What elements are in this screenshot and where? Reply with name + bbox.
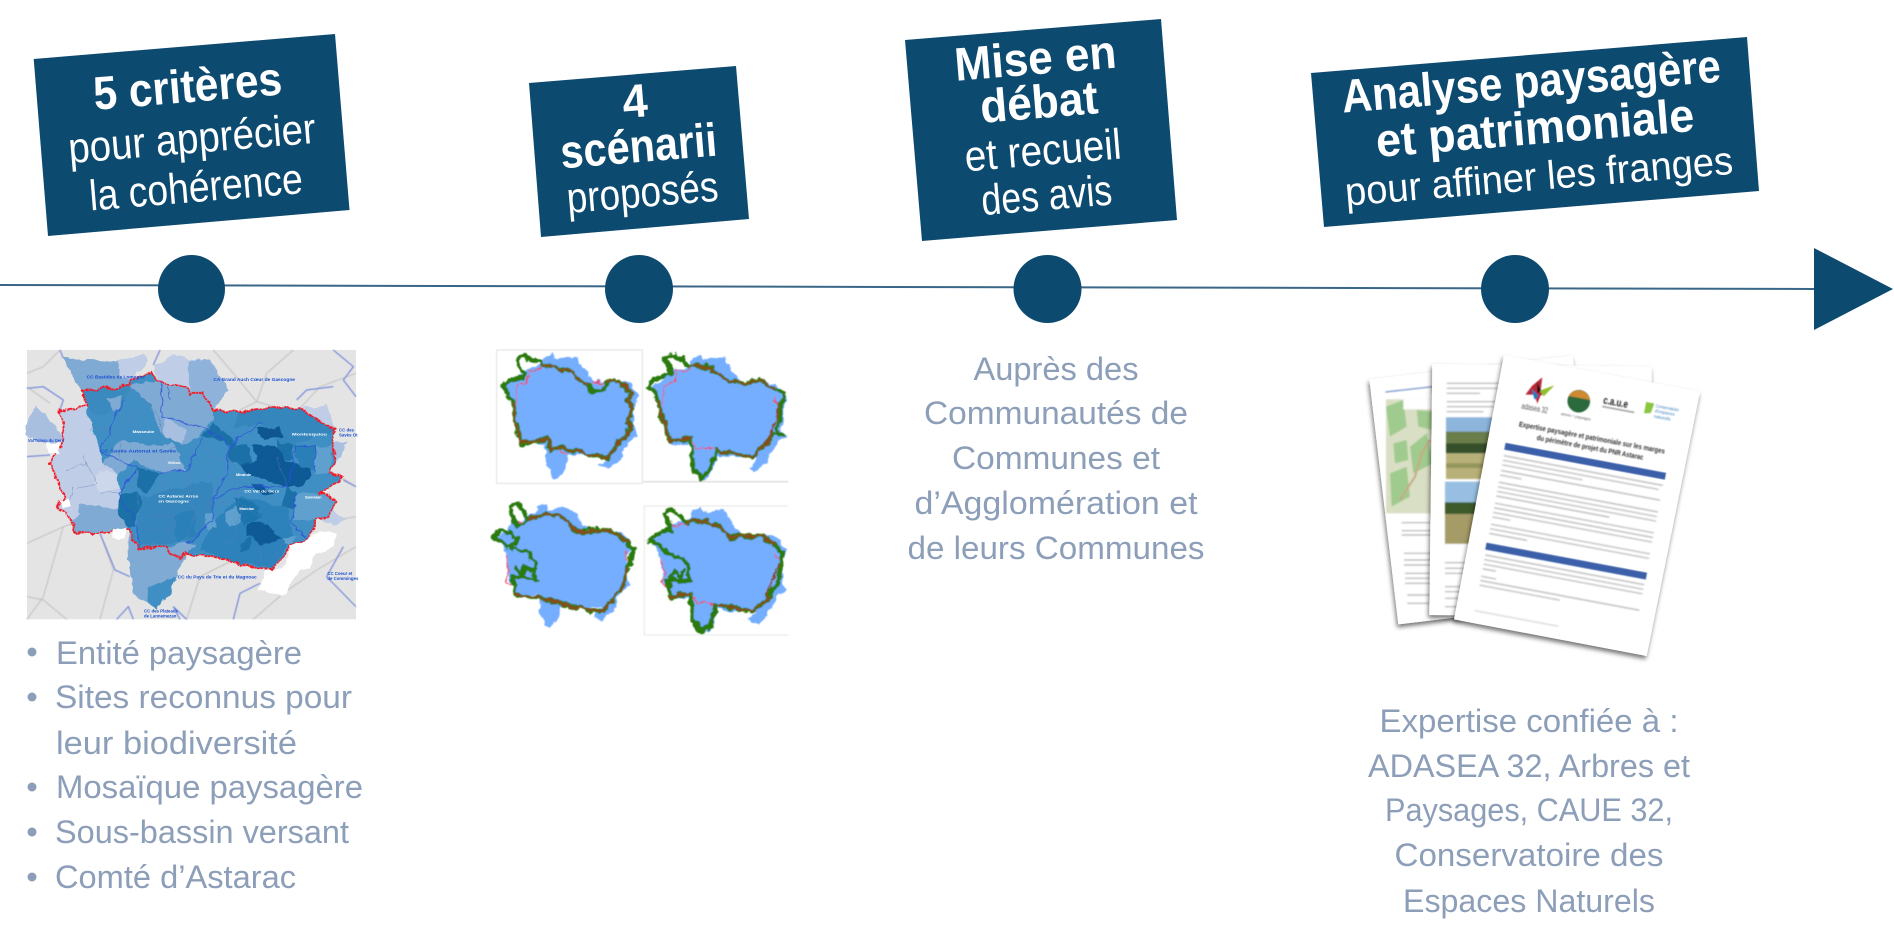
text block: experts: Espaces Naturels [1403, 883, 1655, 919]
heading panel: mise en débat: des avis [979, 166, 1114, 225]
heading panel: 5 critères: la cohérence [87, 155, 305, 221]
scenario 1 [503, 354, 638, 478]
red perimeter [50, 373, 342, 570]
back page [1369, 356, 1603, 624]
heading panel: 4 scénarii [529, 66, 749, 237]
front page [1454, 355, 1700, 656]
map place labels: Mirande [236, 472, 252, 477]
map place labels: CC Astarac Arros [158, 493, 199, 498]
criteria text [55, 635, 363, 895]
map place labels: CC des Plateaux [144, 609, 179, 614]
heading panel: 4 scénarii: proposés [565, 163, 720, 223]
map place labels: Samatan [305, 495, 322, 500]
landscape photo 2 [1445, 482, 1498, 544]
map place labels: CC Coeur et [327, 571, 353, 576]
document stack: landscape study [1369, 355, 1700, 656]
map place labels: CC Val de Gers [244, 489, 280, 494]
map place labels: Villeco [168, 460, 181, 465]
heading panel: 5 critères: 5 critères [91, 52, 284, 120]
darkest communes [257, 427, 285, 440]
text block: experts: ADASEA 32, Arbres et [1368, 748, 1690, 784]
map place labels: Montesquiou [292, 432, 328, 437]
logos: Conservatoire [1655, 403, 1680, 413]
document title: du périmètre de projet du PNR Astarac [1536, 435, 1644, 462]
criteria text: Sites reconnus pour [55, 679, 352, 715]
bullet list: five criteria [28, 635, 363, 895]
map place labels: CC du Pays de Trie et du Magnoac [178, 574, 257, 579]
map place labels: Marciac [239, 506, 255, 511]
scenario 2 [648, 355, 787, 479]
map place labels: CC Bastides de Lomagne [87, 374, 146, 379]
logos [1521, 375, 1680, 439]
map: coherence criteria choropleth [27, 350, 359, 619]
document title: Expertise paysagère et patrimoniale sur les marges [1518, 421, 1665, 456]
map place labels: en Gascogne [158, 498, 190, 503]
text block: consultation audience: Auprès des [974, 351, 1138, 387]
text block: consultation audience: d’Agglomération et [914, 485, 1198, 521]
heading panel: analyse paysagère et patrimoniale: Analyse paysagère [1339, 39, 1723, 123]
body text lines [1475, 456, 1663, 640]
section bar 2 [1485, 543, 1647, 580]
heading panel: 5 critères: pour apprécier [66, 105, 317, 173]
map place labels: CC Savès Autonat et Savès [100, 449, 177, 454]
panel: four scenario maps [493, 350, 788, 635]
milestone dot 4 [1481, 255, 1549, 323]
map place labels: CA Grand Auch Cœur de Gascogne [213, 377, 296, 382]
milestone dot 1 [158, 255, 225, 323]
bullet markers [28, 648, 36, 882]
logos: naturels [1653, 414, 1671, 423]
heading panel: 4 scénarii: scénarii [558, 113, 719, 178]
excluded white communes [47, 443, 337, 595]
milestone dot 3 [1014, 255, 1082, 323]
timeline axis [0, 285, 1816, 289]
map place labels: CC des [339, 428, 355, 433]
criteria text: Mosaïque paysagère [56, 769, 363, 805]
criteria text: Sous-bassin versant [55, 814, 349, 850]
logos: adasea 32 [1521, 402, 1549, 415]
text block: consultation audience [908, 351, 1204, 566]
map place labels: Masseube [133, 429, 155, 434]
map place labels: de Lannemezan [144, 613, 177, 618]
heading panel: analyse paysagère et patrimoniale: et patrimoniale [1374, 88, 1696, 167]
heading panel: mise en débat: débat [978, 70, 1100, 133]
landscape photo 1 [1446, 417, 1499, 479]
heading panel: 4 scénarii: 4 [620, 73, 649, 128]
section bar 1 [1504, 443, 1666, 480]
arrow head [1814, 248, 1893, 330]
milestone dot 2 [605, 255, 673, 323]
heading panel: mise en débat [905, 19, 1177, 241]
parc perimeter fills [50, 373, 342, 570]
logos: c.a.u.e [1602, 394, 1629, 411]
text block: consultation audience: de leurs Communes [908, 530, 1204, 566]
heading panel: mise en débat: Mise en [952, 25, 1118, 91]
logos: arbres + paysages [1561, 412, 1591, 421]
heading panel: analyse paysagère et patrimoniale: pour affiner les franges [1343, 139, 1735, 215]
criteria text: leur biodiversité [56, 725, 297, 761]
map place labels [28, 374, 359, 618]
text block: consultation audience: Communes et [952, 440, 1160, 476]
text block: experts: Conservatoire des [1394, 837, 1664, 873]
scenario 4 [650, 508, 787, 632]
text block: experts: Paysages, CAUE 32, [1385, 792, 1673, 828]
map place labels: de Comminges [327, 576, 359, 581]
outer territory lobes [27, 353, 347, 610]
logos: d'espaces [1654, 408, 1676, 418]
text block: consultation audience: Communautés de [924, 395, 1188, 431]
middle page [1429, 364, 1652, 617]
text block: experts: Expertise confiée à : [1380, 703, 1678, 739]
text block: experts [1368, 703, 1690, 919]
scenario frames [497, 350, 788, 635]
heading panel: analyse paysagère et patrimoniale [1311, 37, 1759, 227]
heading panel: 5 critères [34, 34, 349, 236]
heading panel: mise en débat: et recueil [963, 121, 1123, 181]
criteria text: Entité paysagère [56, 635, 302, 671]
scenario 3 [493, 503, 633, 628]
map place labels: Val'Tolosa du Gers [28, 438, 65, 443]
criteria text: Comté d’Astarac [55, 859, 296, 895]
map place labels: Savès Ot [339, 432, 358, 437]
